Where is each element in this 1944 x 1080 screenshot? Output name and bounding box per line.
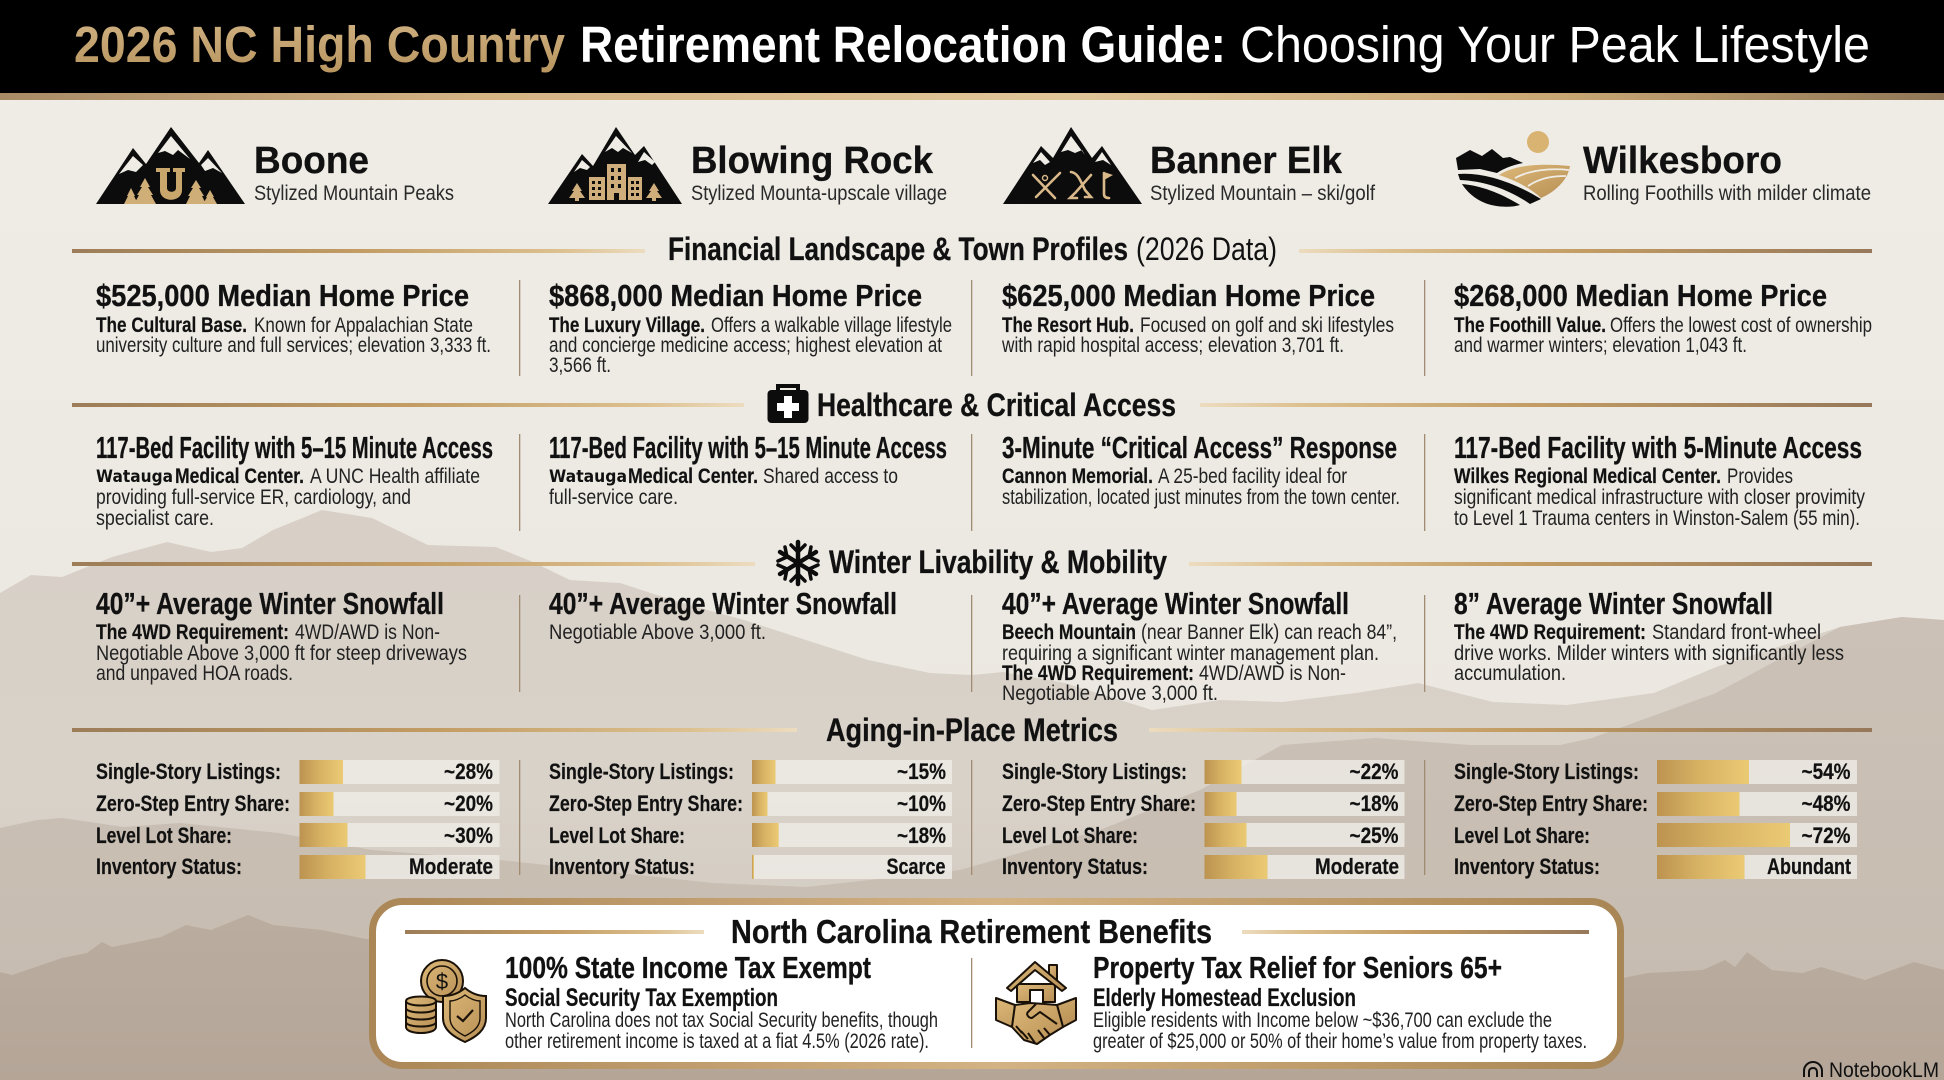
metrics: Blowing Rock (549, 759, 952, 879)
town name: Banner Elk (1150, 140, 1343, 182)
bar: inventory moderate: Moderate (409, 854, 493, 879)
bar: level lot 25: Level Lot Share: (1002, 823, 1138, 848)
icon: house and handshake (996, 962, 1076, 1044)
profile: Blowing Rock: $868,000 Median Home Price (549, 279, 922, 313)
section heading: aging in place (72, 712, 1872, 748)
bar: level lot 25 (1002, 823, 1404, 848)
bar: inventory moderate (1002, 854, 1404, 879)
winter: Wilkesboro: Standard front-wheel (1652, 621, 1821, 644)
benefit description: greater of $25,000 or 50% of their home’s value from property taxes. (1093, 1030, 1587, 1053)
profile: Wilkesboro (1454, 279, 1872, 357)
benefit description (1093, 1009, 1587, 1053)
healthcare: Blowing Rock: 117-Bed Facility with 5–15 Minute Access (549, 431, 947, 465)
profile: Banner Elk: with rapid hospital access; elevation 3,701 ft. (1001, 334, 1344, 357)
bar: zero-step 10: Zero-Step Entry Share: (549, 791, 743, 816)
winter: Banner Elk: Beech Mountain (1002, 621, 1136, 644)
bar: level lot 30: Level Lot Share: (96, 823, 232, 848)
icon: coins and shield: $ (436, 969, 448, 994)
bar: single-story 28: ~28% (444, 759, 493, 784)
benefit: property tax (996, 951, 1587, 1053)
profile: Wilkesboro: Offers the lowest cost of ownership (1610, 314, 1872, 337)
town name: Boone (254, 140, 369, 182)
profile: Blowing Rock: Offers a walkable village lifestyle (711, 314, 952, 337)
bar: inventory scarce: Scarce (886, 854, 946, 879)
profile: Blowing Rock (549, 279, 952, 377)
benefit description: Eligible residents with Income below ~$36,700 can exclude the (1093, 1009, 1552, 1032)
healthcare: Blowing Rock: Shared access to (763, 465, 898, 488)
title: white regular part: Choosing Your Peak Lifestyle (1240, 16, 1870, 73)
bar: single-story 15: Single-Story Listings: (549, 759, 734, 784)
healthcare: Banner Elk: stabilization, located just minutes from the town center. (1002, 486, 1400, 509)
profile: Boone: university culture and full services; elevation 3,333 ft. (96, 334, 491, 357)
profile: Wilkesboro: The Foothill Value. (1454, 314, 1606, 337)
healthcare: Blowing Rock (549, 431, 947, 509)
heading text: Winter Livability & Mobility (829, 544, 1167, 580)
winter row (96, 587, 1844, 705)
icon: snowflake (778, 542, 818, 584)
benefit description (505, 1009, 938, 1053)
bar: inventory moderate: Moderate (1315, 854, 1399, 879)
bar: single-story 22: ~22% (1350, 759, 1398, 784)
bar: zero-step 18: Zero-Step Entry Share: (1002, 791, 1196, 816)
profile: Boone: The Cultural Base. (96, 314, 247, 337)
title banner (0, 0, 1944, 100)
icon: medical kit (768, 386, 808, 423)
benefit subheading: Social Security Tax Exemption (505, 984, 778, 1012)
section heading: financial landscape (72, 231, 1872, 267)
winter: Boone: The 4WD Requirement: (96, 621, 289, 644)
town header: Boone (96, 127, 454, 205)
icon: Boone mountain (96, 127, 245, 204)
town header: Wilkesboro (1456, 131, 1871, 207)
town header: Banner Elk (1003, 127, 1375, 205)
benefit subheading: Elderly Homestead Exclusion (1093, 984, 1356, 1012)
winter: Wilkesboro: drive works. Milder winters with significantly less (1454, 642, 1844, 665)
winter: Banner Elk: 4WD/AWD is Non- (1199, 662, 1346, 685)
winter: Boone: 4WD/AWD is Non- (295, 621, 440, 644)
bar: level lot 72 (1454, 823, 1857, 848)
bar: inventory scarce: Inventory Status: (549, 854, 695, 879)
profile: Banner Elk (1001, 279, 1394, 357)
healthcare: Boone: A UNC Health affiliate (310, 465, 480, 488)
winter: Blowing Rock: Negotiable Above 3,000 ft. (549, 621, 766, 644)
bar: single-story 54 (1454, 759, 1857, 784)
bar: inventory abundant: Abundant (1767, 854, 1852, 879)
bar: zero-step 20: ~20% (444, 791, 493, 816)
title: white bold part: Retirement Relocation Guide: (580, 16, 1226, 73)
healthcare: Boone: Medical Center. (175, 465, 304, 488)
town descriptor: Rolling Foothills with milder climate (1583, 182, 1871, 205)
financial profiles row (96, 279, 1872, 377)
bar: level lot 18 (549, 823, 952, 848)
bar: level lot 30 (96, 823, 500, 848)
bar: zero-step 10: ~10% (897, 791, 946, 816)
profile: Blowing Rock: 3,566 ft. (549, 354, 611, 377)
profile: Banner Elk: $625,000 Median Home Price (1002, 279, 1375, 313)
metrics: Banner Elk (1002, 759, 1404, 879)
aging in place metrics (96, 759, 1857, 879)
bar: zero-step 48: ~48% (1802, 791, 1850, 816)
metrics: Wilkesboro (1454, 759, 1857, 879)
town descriptor: Stylized Mountain Peaks (254, 182, 454, 205)
winter: Wilkesboro (1454, 587, 1844, 685)
winter: Banner Elk: 40”+ Average Winter Snowfall (1002, 587, 1349, 621)
winter: Banner Elk (1002, 587, 1397, 705)
bar: inventory abundant (1454, 854, 1857, 879)
town name: Wilkesboro (1583, 140, 1782, 182)
bar: zero-step 18: ~18% (1350, 791, 1398, 816)
healthcare: Blowing Rock: Medical Center. (628, 465, 758, 488)
icon: Blowing Rock mountain with village (548, 127, 682, 204)
winter: Banner Elk: (near Banner Elk) can reach 84”, (1141, 621, 1397, 644)
town descriptor: Stylized Mountain – ski/golf (1150, 182, 1375, 205)
healthcare: Banner Elk: A 25-bed facility ideal for (1158, 465, 1347, 488)
profile: Wilkesboro: and warmer winters; elevation 1,043 ft. (1454, 334, 1747, 357)
profile: Banner Elk: Focused on golf and ski lifestyles (1140, 314, 1394, 337)
icon: NotebookLM mark (1804, 1062, 1822, 1077)
healthcare: Banner Elk (1002, 431, 1400, 509)
bar: inventory moderate: Inventory Status: (96, 854, 242, 879)
profile: Blowing Rock: The Luxury Village. (549, 314, 705, 337)
healthcare: Blowing Rock: Watauga (549, 467, 627, 486)
healthcare: Boone: 117-Bed Facility with 5–15 Minute Access (96, 431, 493, 465)
section heading: healthcare (72, 386, 1872, 423)
bar: single-story 54: Single-Story Listings: (1454, 759, 1639, 784)
panel title: North Carolina Retirement Benefits (731, 913, 1212, 950)
bar: zero-step 18 (1002, 791, 1404, 816)
profile: Banner Elk: The Resort Hub. (1002, 314, 1134, 337)
winter: Boone: 40”+ Average Winter Snowfall (96, 587, 444, 621)
heading text: Financial Landscape & Town Profiles (668, 231, 1128, 267)
heading text: Aging-in-Place Metrics (826, 712, 1118, 748)
winter: Banner Elk: Negotiable Above 3,000 ft. (1002, 682, 1218, 705)
bar: single-story 54: ~54% (1802, 759, 1850, 784)
heading qualifier: (2026 Data) (1136, 231, 1277, 267)
section heading: winter (72, 542, 1872, 584)
healthcare: Boone: Watauga (96, 467, 173, 486)
metrics: Boone (96, 759, 500, 879)
healthcare: Wilkesboro: Wilkes Regional Medical Center. (1454, 465, 1721, 488)
bar: level lot 25: ~25% (1350, 823, 1398, 848)
winter: Banner Elk: The 4WD Requirement: (1002, 662, 1194, 685)
healthcare: Banner Elk: 3-Minute “Critical Access” Response (1002, 431, 1397, 465)
benefit heading: Property Tax Relief for Seniors 65+ (1093, 951, 1502, 985)
bar: level lot 72: ~72% (1802, 823, 1850, 848)
title: gold part: 2026 NC High Country (74, 16, 566, 73)
healthcare: Wilkesboro: to Level 1 Trauma centers in Winston-Salem (55 min). (1454, 507, 1860, 530)
bar: level lot 72: Level Lot Share: (1454, 823, 1590, 848)
winter: Banner Elk: requiring a significant winter management plan. (1002, 642, 1379, 665)
bar: inventory abundant: Inventory Status: (1454, 854, 1600, 879)
benefit description: North Carolina does not tax Social Security benefits, though (505, 1009, 938, 1032)
profile: Boone (96, 279, 491, 357)
heading text: Healthcare & Critical Access (817, 387, 1176, 423)
profile: Boone: Known for Appalachian State (254, 314, 473, 337)
winter: Wilkesboro: accumulation. (1454, 662, 1566, 685)
profile: Boone: $525,000 Median Home Price (96, 279, 469, 313)
bar: inventory moderate: Inventory Status: (1002, 854, 1148, 879)
bar: single-story 15 (549, 759, 952, 784)
bar: zero-step 20 (96, 791, 500, 816)
winter: Boone (96, 587, 467, 685)
healthcare: Boone: providing full-service ER, cardiology, and (96, 486, 411, 509)
bar: single-story 28 (96, 759, 500, 784)
bar: single-story 28: Single-Story Listings: (96, 759, 281, 784)
icon: coins and shield (406, 960, 486, 1042)
bar: zero-step 48: Zero-Step Entry Share: (1454, 791, 1648, 816)
town descriptor: Stylized Mounta-upscale village (691, 182, 947, 205)
winter: Wilkesboro: The 4WD Requirement: (1454, 621, 1646, 644)
healthcare: Wilkesboro: Provides (1727, 465, 1793, 488)
healthcare: Banner Elk: Cannon Memorial. (1002, 465, 1153, 488)
winter: Blowing Rock (549, 587, 897, 644)
winter: Wilkesboro: 8” Average Winter Snowfall (1454, 587, 1773, 621)
winter: Blowing Rock: 40”+ Average Winter Snowfall (549, 587, 897, 621)
town name: Blowing Rock (691, 140, 934, 182)
bar: zero-step 20: Zero-Step Entry Share: (96, 791, 290, 816)
bar: single-story 22: Single-Story Listings: (1002, 759, 1187, 784)
bar: level lot 18: Level Lot Share: (549, 823, 685, 848)
icon: Wilkesboro foothills (1456, 131, 1570, 207)
bar: level lot 18: ~18% (897, 823, 946, 848)
healthcare row (96, 431, 1865, 531)
healthcare: Wilkesboro: significant medical infrastructure with closer provimity (1454, 486, 1865, 509)
bar: inventory moderate (96, 854, 500, 879)
benefit description: other retirement income is taxed at a fiat 4.5% (2026 rate). (505, 1030, 929, 1053)
healthcare: Boone (96, 431, 493, 530)
panel: North Carolina retirement benefits (372, 902, 1620, 1066)
town header: Blowing Rock (548, 127, 947, 205)
healthcare: Wilkesboro (1454, 431, 1865, 530)
winter: Boone: Negotiable Above 3,000 ft for steep driveways (96, 642, 467, 665)
bar: single-story 22 (1002, 759, 1404, 784)
healthcare: Blowing Rock: full-service care. (549, 486, 678, 509)
bar: zero-step 10 (549, 791, 952, 816)
benefit heading: 100% State Income Tax Exempt (505, 951, 871, 985)
bar: single-story 15: ~15% (897, 759, 946, 784)
bar: zero-step 48 (1454, 791, 1857, 816)
profile: Wilkesboro: $268,000 Median Home Price (1454, 279, 1827, 313)
bar: level lot 30: ~30% (444, 823, 493, 848)
bar: inventory scarce (549, 854, 952, 879)
benefit: income tax (406, 951, 938, 1053)
winter: Boone: and unpaved HOA roads. (96, 662, 293, 685)
icon: Banner Elk mountain with ski and golf (1003, 127, 1142, 204)
profile: Blowing Rock: and concierge medicine access; highest elevation at (549, 334, 942, 357)
healthcare: Boone: specialist care. (96, 507, 214, 530)
watermark: NotebookLM (1804, 1059, 1939, 1080)
